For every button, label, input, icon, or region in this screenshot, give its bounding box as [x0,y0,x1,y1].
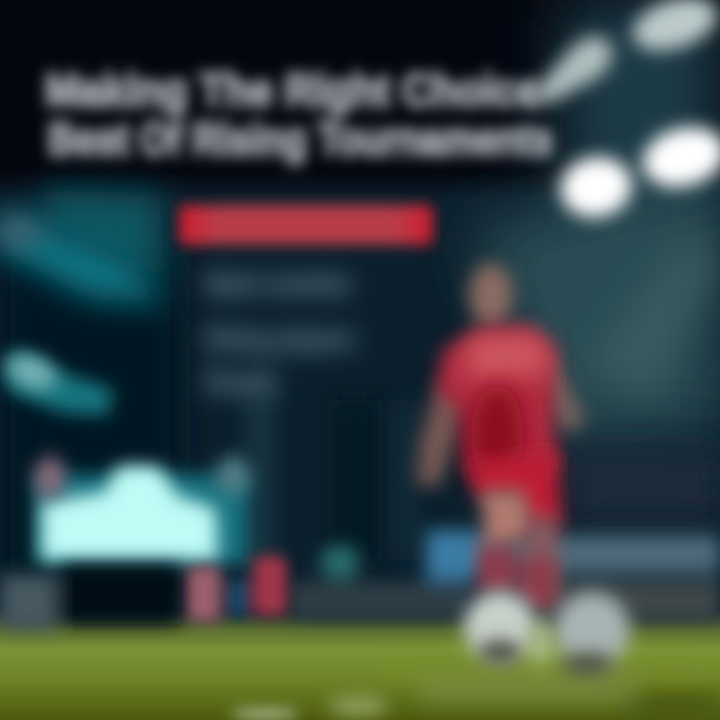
text list below banner: Rising players [205,323,355,354]
shorts [466,448,562,530]
socks [478,546,556,608]
light: lower left spot [555,151,637,223]
legs [480,490,536,552]
title: Making The Right Choice [45,64,540,116]
stands band [0,530,720,630]
text list below banner: Results [205,366,277,397]
right arm [545,346,586,434]
head [469,263,513,327]
jersey: dark centre [471,385,523,485]
football: left [464,590,536,664]
light: lower right spot [636,118,720,196]
light: upper right streak [626,0,720,60]
player: left [187,566,221,622]
background players [187,556,287,622]
football: right [532,592,630,675]
glowing teal panel [35,456,249,564]
teal ribbon: lower [5,354,114,416]
jersey: chest highlight [468,334,552,382]
teal ribbon: upper [40,190,165,280]
stadium lights [528,0,720,223]
light: upper left streak [528,36,612,104]
red banner [179,205,433,245]
title [45,64,553,165]
title: Best Of Rising Tournaments [48,113,553,165]
decorative teal shapes, left [0,190,168,416]
left arm [416,385,469,488]
text list below banner: Match schedule [205,268,350,299]
player: right [253,556,287,616]
main player in red [416,263,586,608]
pitch [231,650,720,720]
jersey [436,326,556,472]
text list below banner [205,268,355,397]
